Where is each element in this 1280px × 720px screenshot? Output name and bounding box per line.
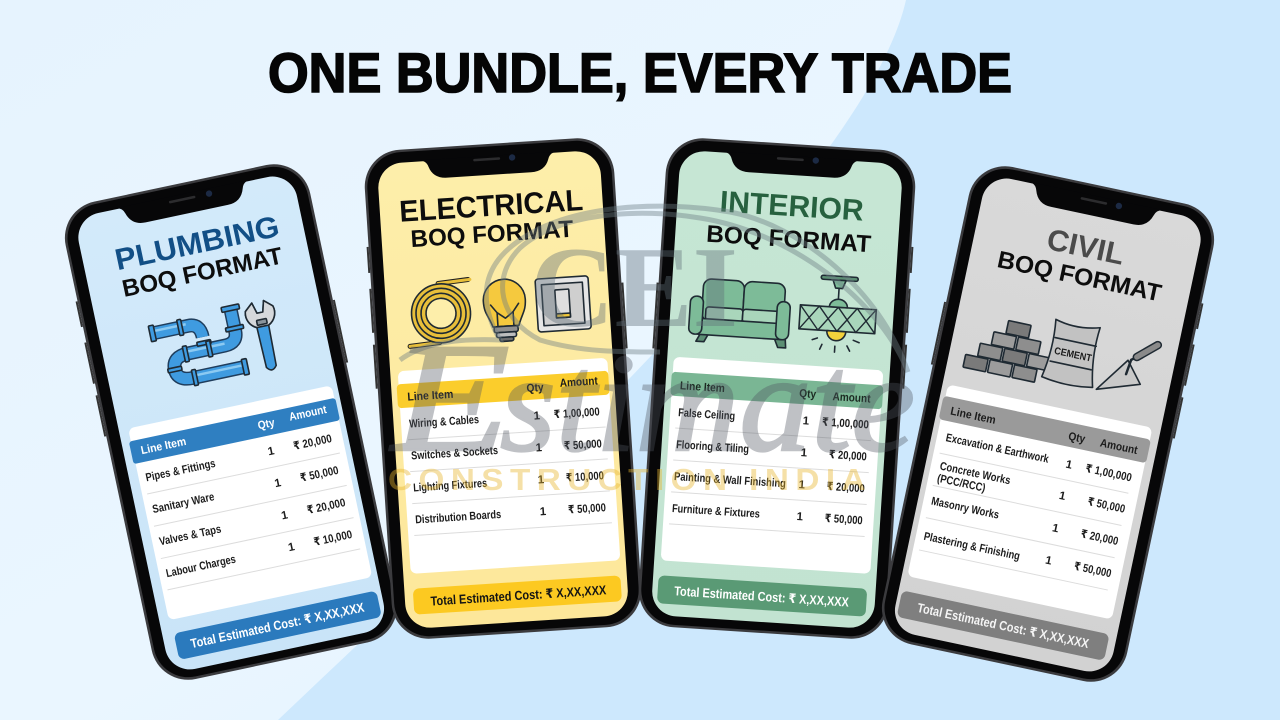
row: plastering: ₹ 50,000 <box>1073 561 1112 580</box>
table header band <box>939 396 1151 463</box>
row: excavation: Excavation & Earthwork <box>945 432 1050 466</box>
row: plastering: 1 <box>1044 555 1053 568</box>
camera <box>205 190 213 197</box>
row: concrete: ₹ 50,000 <box>1086 496 1126 516</box>
phone bezel <box>365 139 641 638</box>
row: excavation: 1 <box>1065 459 1074 472</box>
phone body <box>58 157 404 687</box>
row: painting: Painting & Wall Finishing <box>674 471 786 490</box>
speaker <box>473 157 500 161</box>
row: wiring: ₹ 1,00,000 <box>553 406 600 421</box>
watermark word stimate: stimate <box>500 326 915 481</box>
phone side buttons <box>651 231 913 389</box>
row: labour <box>165 529 353 580</box>
table header labels <box>407 375 599 404</box>
screen <box>74 172 389 674</box>
table card <box>660 357 884 574</box>
row: flooring: 1 <box>800 447 808 460</box>
phone side buttons <box>367 231 629 389</box>
icon: cement bag <box>1041 318 1105 390</box>
table header labels <box>139 404 328 457</box>
phone: electrical <box>360 136 646 641</box>
total bar <box>413 575 622 615</box>
watermark logo <box>388 206 915 497</box>
row dividers <box>408 427 612 536</box>
table card <box>905 384 1153 620</box>
row dividers <box>669 428 871 536</box>
table header labels: Amount <box>288 404 328 424</box>
row: pipes <box>145 433 333 484</box>
screen <box>651 150 903 629</box>
table header labels: Line Item <box>680 380 725 395</box>
phone body <box>875 159 1221 689</box>
total bar <box>174 590 382 660</box>
notch <box>721 151 862 179</box>
total bar <box>657 575 867 617</box>
table header labels: Amount <box>1099 437 1139 457</box>
row: distribution: Distribution Boards <box>415 509 502 526</box>
row: painting: ₹ 20,000 <box>826 481 865 495</box>
phone bezel <box>878 162 1218 686</box>
total text: Total Estimated Cost: ₹ X,XX,XXX <box>674 583 850 610</box>
row: switches: 1 <box>535 442 543 454</box>
phone body <box>362 136 644 641</box>
row: switches <box>411 438 602 463</box>
row: excavation <box>944 432 1133 484</box>
row dividers <box>919 453 1128 590</box>
table header labels: Line Item <box>407 389 454 404</box>
icon: cement bag: CEMENT <box>1053 346 1093 364</box>
row: flooring: Flooring & Tiling <box>676 439 749 456</box>
icon: cable coil <box>406 279 474 346</box>
table header labels: Qty <box>1067 431 1087 446</box>
row: switches: ₹ 50,000 <box>563 438 602 453</box>
row: distribution: ₹ 50,000 <box>568 502 606 517</box>
table card <box>396 358 620 574</box>
subheading: BOQ FORMAT <box>410 216 575 253</box>
icon: sofa <box>688 278 792 348</box>
row: ceiling: ₹ 1,00,000 <box>822 416 869 431</box>
row: ceiling <box>678 407 869 431</box>
notch <box>1024 182 1165 230</box>
watermark letters CEI: CEI <box>530 224 738 351</box>
watermark construction india: CONSTRUCTION INDIA <box>388 462 872 497</box>
row: excavation: ₹ 1,00,000 <box>1084 463 1133 484</box>
speaker <box>1080 197 1107 205</box>
phone: civil <box>873 159 1223 689</box>
row: switches: Switches & Sockets <box>411 445 498 463</box>
phone bezel <box>61 160 401 684</box>
total text: Total Estimated Cost: ₹ X,XX,XXX <box>916 600 1091 651</box>
heading: plumbing: PLUMBING <box>112 210 282 277</box>
row: flooring: ₹ 20,000 <box>828 449 867 463</box>
row: labour: Labour Charges <box>165 554 237 580</box>
table header band <box>129 398 340 464</box>
row: valves: 1 <box>280 509 290 522</box>
row: masonry: ₹ 20,000 <box>1080 528 1119 548</box>
row: furniture: 1 <box>796 511 804 523</box>
table header labels <box>949 406 1139 457</box>
table header labels: Line Item <box>949 406 997 427</box>
row: masonry: Masonry Works <box>930 496 1000 522</box>
row: furniture <box>672 503 863 527</box>
watermark script Estimate <box>390 311 915 484</box>
row: flooring <box>676 439 867 463</box>
table header labels <box>679 380 871 406</box>
phone: interior <box>634 136 920 641</box>
heading: civil: CIVIL <box>1044 223 1127 272</box>
row: painting <box>674 471 865 495</box>
table header labels: Line Item <box>140 436 187 457</box>
watermark capital E: E <box>390 311 510 484</box>
row: lighting: Lighting Fixtures <box>413 478 487 494</box>
row: painting: 1 <box>798 479 806 492</box>
row: pipes: 1 <box>267 445 276 458</box>
row: masonry <box>930 496 1119 548</box>
row: concrete <box>936 461 1127 524</box>
phone side buttons <box>926 251 1203 439</box>
camera <box>1115 202 1123 210</box>
row: sanitary <box>151 465 340 516</box>
row: valves <box>158 497 347 548</box>
heading: electrical: ELECTRICAL <box>398 184 584 229</box>
heading: interior: INTERIOR <box>719 185 865 228</box>
total text: Total Estimated Cost: ₹ X,XX,XXX <box>430 582 607 609</box>
camera <box>509 154 516 161</box>
table header labels: Amount <box>559 375 598 390</box>
row: concrete: Concrete Works <box>939 461 1011 487</box>
table header labels: Qty <box>799 388 817 401</box>
row: lighting: ₹ 10,000 <box>566 470 604 485</box>
icon: trowel <box>1096 335 1158 400</box>
subheading: BOQ FORMAT <box>705 221 872 258</box>
phone side buttons <box>76 249 353 437</box>
notch <box>418 151 559 179</box>
screen <box>890 174 1205 676</box>
row: wiring: 1 <box>533 410 541 423</box>
row: furniture: Furniture & Fixtures <box>672 503 760 521</box>
screen <box>377 150 629 629</box>
row: sanitary: 1 <box>273 477 283 490</box>
row: concrete: 1 <box>1058 490 1067 503</box>
total bar <box>897 590 1110 661</box>
icon: bricks <box>963 313 1058 385</box>
row: masonry: 1 <box>1051 522 1060 535</box>
watermark swoosh <box>400 206 908 372</box>
row: ceiling: False Ceiling <box>678 407 735 423</box>
table header band <box>397 371 610 408</box>
row: distribution <box>415 502 606 526</box>
row: plastering: Plastering & Finishing <box>923 531 1021 563</box>
row: ceiling: 1 <box>802 415 810 428</box>
row: labour: 1 <box>287 541 296 554</box>
row: labour: ₹ 10,000 <box>313 529 353 549</box>
icon: pipes <box>148 304 253 393</box>
phone bezel <box>639 139 915 638</box>
icon: ceiling lamp <box>798 274 878 355</box>
speaker <box>777 157 804 161</box>
total text: Total Estimated Cost: ₹ X,XX,XXX <box>189 600 366 651</box>
subheading: BOQ FORMAT <box>120 242 285 303</box>
phone body <box>636 136 918 641</box>
icon: wrench <box>243 299 286 373</box>
table header labels: Qty <box>257 417 276 432</box>
table header labels: Amount <box>832 391 871 406</box>
camera <box>812 157 819 164</box>
row: lighting <box>413 470 604 494</box>
row: sanitary: Sanitary Ware <box>151 491 216 516</box>
row: concrete: (PCC/RCC) <box>936 473 987 495</box>
row: lighting: 1 <box>537 474 545 486</box>
row: distribution: 1 <box>539 506 547 518</box>
row: wiring: Wiring & Cables <box>409 414 479 431</box>
icon: light bulb <box>482 278 528 343</box>
icon: switch <box>535 276 591 332</box>
row dividers <box>147 453 360 590</box>
notch <box>114 180 255 228</box>
speaker <box>169 196 196 204</box>
table card <box>126 385 373 621</box>
row: valves: ₹ 20,000 <box>306 497 347 517</box>
row: wiring <box>409 406 600 431</box>
row: sanitary: ₹ 50,000 <box>299 465 340 485</box>
row: plastering <box>923 529 1112 582</box>
phone: plumbing <box>56 157 406 687</box>
background diagonal panel <box>278 0 1280 720</box>
table header band <box>670 372 883 409</box>
row: furniture: ₹ 50,000 <box>824 513 863 527</box>
title: ONE BUNDLE, EVERY TRADE <box>268 41 1012 104</box>
subheading: BOQ FORMAT <box>995 246 1164 307</box>
row: pipes: Pipes & Fittings <box>145 458 217 484</box>
row: valves: Valves & Taps <box>158 524 222 548</box>
row: pipes: ₹ 20,000 <box>292 433 333 453</box>
table header labels: Qty <box>526 382 544 395</box>
